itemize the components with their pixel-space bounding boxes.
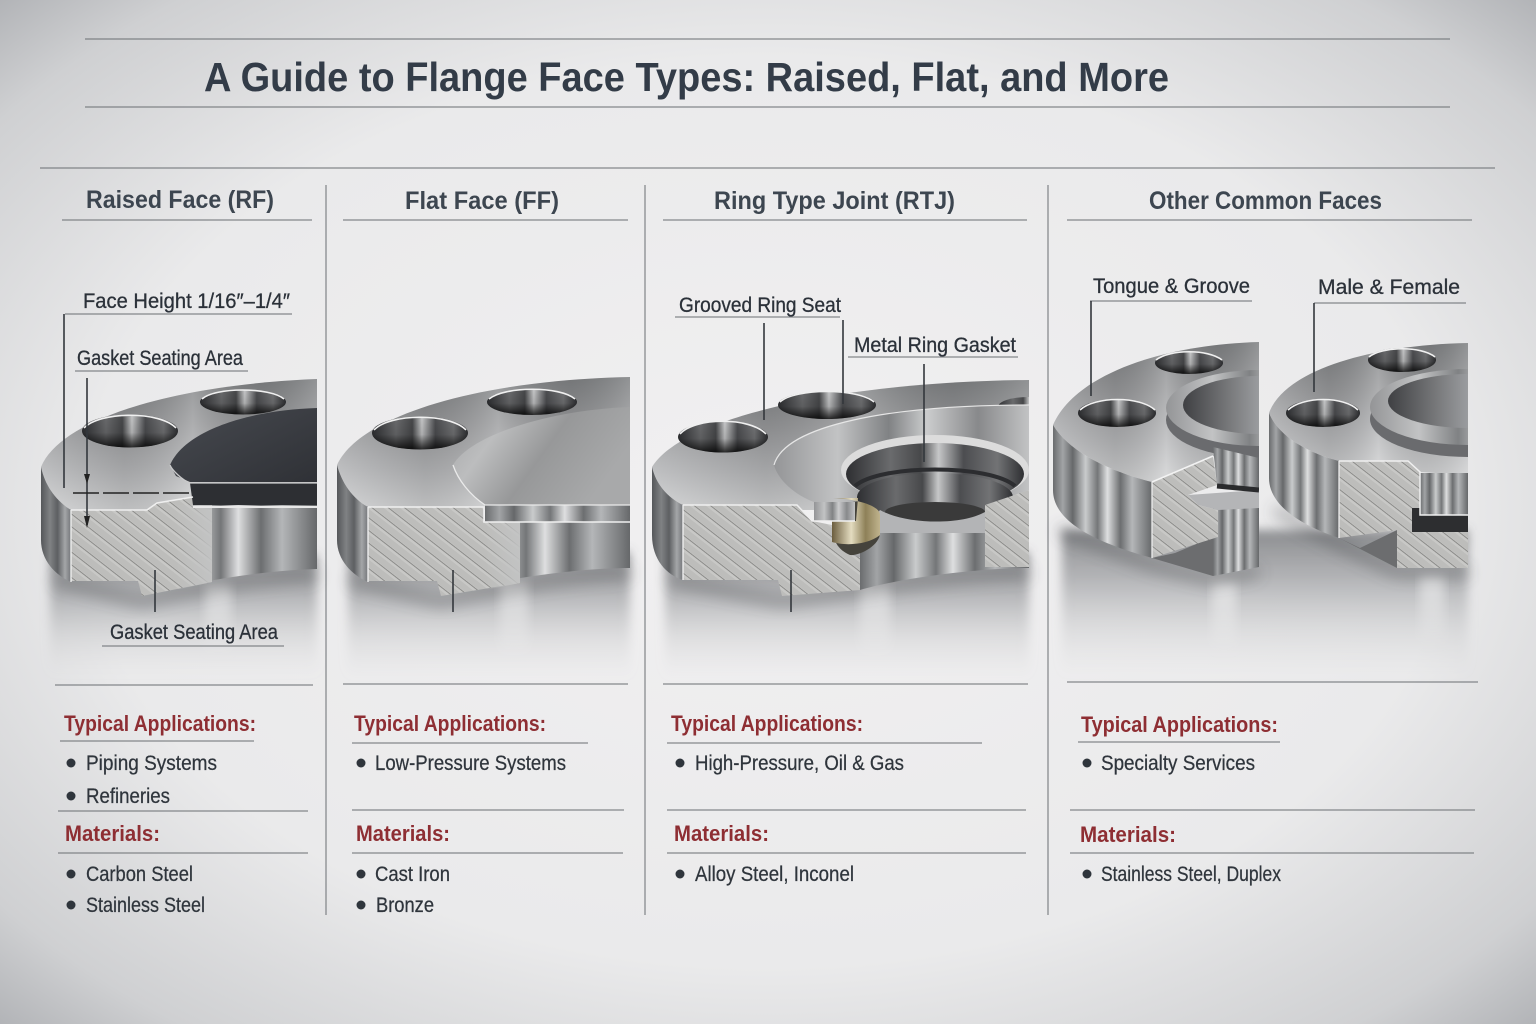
applications: other faces: Typical Applications: — [1081, 712, 1278, 737]
label: tongue and groove: Tongue & Groove — [1093, 275, 1250, 298]
label: gasket seating area upper: Gasket Seating Area — [77, 347, 243, 370]
flange illustration: tongue and groove — [1053, 342, 1259, 576]
label: metal ring gasket: Metal Ring Gasket — [854, 334, 1016, 357]
applications: raised face: Refineries — [86, 785, 170, 808]
materials: raised face: Materials: — [65, 821, 160, 846]
flange illustration: raised face — [41, 379, 317, 596]
applications: other faces: Specialty Services — [1101, 752, 1255, 775]
flange illustration: ring type joint — [652, 380, 1058, 596]
materials: flat face: Materials: — [356, 821, 450, 846]
applications: ring type joint: High-Pressure, Oil & Gas — [695, 752, 904, 775]
title: A Guide to Flange Face Types: Raised, Flat, and More — [204, 54, 1169, 100]
floor reflection: ring type joint — [665, 552, 1029, 677]
flange illustration: male and female — [1269, 343, 1468, 568]
materials: flat face: Cast Iron — [375, 863, 450, 886]
panel: ring type joint — [652, 187, 1058, 886]
label: male and female: Male & Female — [1318, 276, 1460, 299]
applications: raised face — [58, 711, 308, 811]
materials: other faces: Stainless Steel, Duplex — [1101, 863, 1281, 886]
materials: ring type joint: Alloy Steel, Inconel — [695, 863, 854, 886]
floor reflection: flat face — [348, 552, 630, 677]
materials: ring type joint — [667, 821, 1026, 886]
label: gasket seating area lower: Gasket Seating Area — [110, 621, 278, 644]
materials: other faces: Materials: — [1080, 822, 1176, 847]
materials: raised face — [58, 821, 308, 917]
applications: ring type joint — [667, 711, 1026, 810]
applications: other faces — [1070, 712, 1475, 810]
heading: flat face: Flat Face (FF) — [405, 187, 559, 215]
materials: flat face: Bronze — [376, 894, 434, 917]
applications: flat face: Typical Applications: — [354, 711, 546, 736]
panel: other common faces — [1052, 191, 1478, 886]
materials: ring type joint: Materials: — [674, 821, 769, 846]
applications: raised face: Typical Applications: — [64, 711, 256, 736]
heading: other common faces: Other Common Faces — [1149, 187, 1382, 215]
applications: ring type joint: Typical Applications: — [671, 711, 863, 736]
panel: raised face — [41, 186, 317, 917]
leader: lower ring type joint — [790, 570, 792, 612]
materials: flat face — [352, 821, 623, 917]
panel: flat face — [337, 187, 630, 917]
flange illustration: flat face — [337, 377, 630, 596]
applications: flat face — [352, 711, 624, 810]
dimension markers: raised face — [73, 378, 190, 528]
applications: raised face: Piping Systems — [86, 752, 217, 775]
label: grooved ring seat: Grooved Ring Seat — [679, 294, 841, 317]
heading: raised face: Raised Face (RF) — [86, 186, 274, 214]
label: face height: Face Height 1/16″–1/4″ — [83, 290, 291, 313]
materials: other faces — [1070, 822, 1474, 886]
materials: raised face: Carbon Steel — [86, 863, 193, 886]
applications: flat face: Low-Pressure Systems — [375, 752, 566, 775]
floor reflection: other common faces — [1060, 510, 1468, 675]
heading: ring type joint: Ring Type Joint (RTJ) — [714, 187, 955, 215]
floor reflection: raised face — [50, 555, 317, 675]
leader: flat face — [452, 570, 454, 612]
materials: raised face: Stainless Steel — [86, 894, 205, 917]
